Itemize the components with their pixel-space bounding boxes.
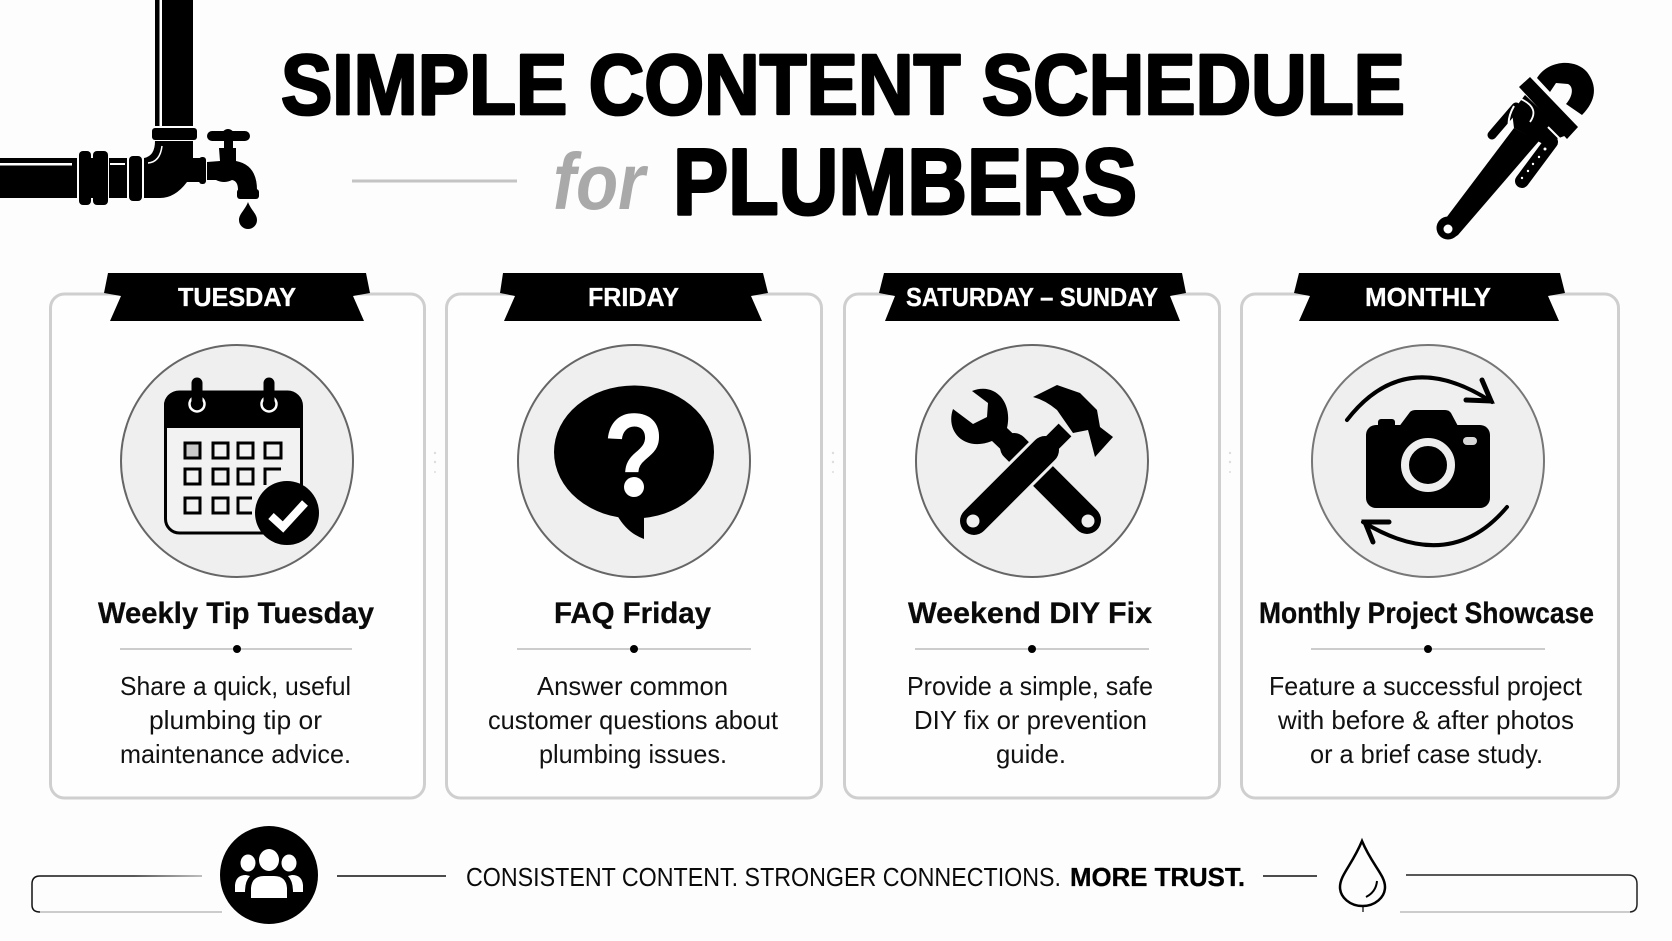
text: Friday description: customer questions about <box>488 705 779 735</box>
panel: Saturday-Sunday card <box>844 273 1220 798</box>
ribbon: Monthly <box>1294 273 1565 321</box>
icon: people group <box>220 826 318 924</box>
text: Tuesday description <box>120 671 351 769</box>
icon: question speech bubble: ? <box>603 390 665 523</box>
icon: question speech bubble <box>518 345 750 577</box>
text: Friday description: Answer common <box>537 671 728 701</box>
heading: FAQ Friday: FAQ Friday <box>554 597 711 630</box>
ribbon: Tuesday: TUESDAY <box>178 282 296 312</box>
text: Weekend description: guide. <box>996 739 1066 769</box>
title: for <box>553 137 648 226</box>
ribbon: Saturday-Sunday <box>879 273 1186 321</box>
text: tagline: CONSISTENT CONTENT. STRONGER CONNECTIONS. <box>466 862 1061 892</box>
text: Weekend description: Provide a simple, safe <box>907 671 1153 701</box>
text: Friday description: plumbing issues. <box>539 739 727 769</box>
heading: Weekend DIY Fix: Weekend DIY Fix <box>908 597 1152 630</box>
ribbon: Tuesday <box>104 273 370 321</box>
icon: calendar with check mark <box>121 345 353 577</box>
text: Weekend description <box>907 671 1153 769</box>
heading: Monthly Project Showcase: Monthly Project Showcase <box>1259 597 1594 630</box>
title <box>281 38 1405 234</box>
heading: Weekly Tip Tuesday: Weekly Tip Tuesday <box>98 597 374 630</box>
text: Friday description <box>488 671 779 769</box>
text: Monthly description: with before & after photos <box>1277 705 1574 735</box>
icon: camera with rotating arrows <box>1312 345 1544 577</box>
text: Tuesday description: plumbing tip or <box>149 705 322 735</box>
icon: water drop <box>1340 841 1385 906</box>
text: tagline: MORE TRUST. <box>1070 862 1245 892</box>
text: Monthly description: Feature a successful project <box>1269 671 1583 701</box>
text: Tuesday description: Share a quick, useful <box>120 671 351 701</box>
panel: Friday card <box>446 273 822 798</box>
text: Monthly description: or a brief case study. <box>1310 739 1543 769</box>
ribbon: Monthly: MONTHLY <box>1365 282 1491 312</box>
ribbon: Saturday-Sunday: SATURDAY – SUNDAY <box>906 282 1158 312</box>
text: Weekend description: DIY fix or prevention <box>914 705 1147 735</box>
text: Monthly description <box>1269 671 1583 769</box>
title: SIMPLE CONTENT SCHEDULE <box>281 38 1405 133</box>
ribbon: Friday: FRIDAY <box>588 282 679 312</box>
icon: crossed wrench and hammer <box>916 345 1148 577</box>
panel: Tuesday card <box>50 273 424 798</box>
panel: Monthly card <box>1242 273 1618 798</box>
banner: bottom tagline <box>32 826 1637 924</box>
ribbon: Friday <box>500 273 768 321</box>
text: Tuesday description: maintenance advice. <box>120 739 351 769</box>
title: PLUMBERS <box>673 129 1137 234</box>
icon: pipe and dripping faucet <box>0 0 259 229</box>
icon: pipe wrench <box>1436 63 1594 240</box>
